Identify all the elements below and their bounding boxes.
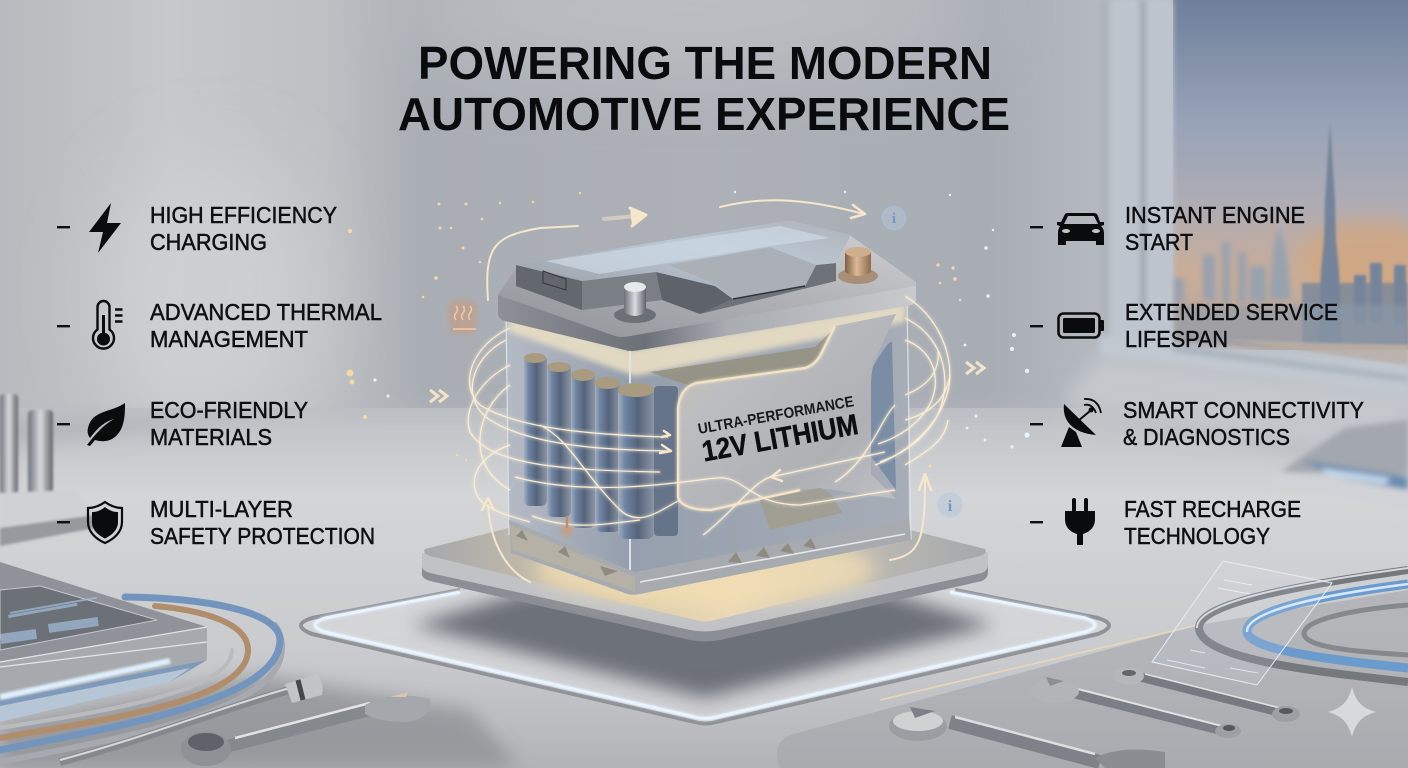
metal cylinders left [0,394,95,546]
feature: extended service lifespan: LIFESPAN [1125,326,1228,352]
wrench left [181,692,430,766]
feature: multi-layer safety protection [57,496,375,549]
icon: info bottom [938,493,962,517]
base feet [509,519,911,595]
battery body: transparent case [506,303,911,580]
left feature list [57,202,382,549]
feature: extended service lifespan: EXTENDED SERVICE [1125,299,1338,325]
feature: instant engine start [1030,202,1305,255]
icon: heat warning [449,300,477,334]
title [398,37,1010,140]
feature: eco-friendly materials [57,397,308,450]
feature: high efficiency charging: HIGH EFFICIENCY [150,202,337,228]
cables left [0,597,282,762]
feature: high efficiency charging [57,202,337,255]
energy rings and arrows [468,296,950,535]
feature: fast recharge technology: FAST RECHARGE [1124,496,1301,522]
chevrons left [430,390,447,402]
label text: ultra-performance 12V lithium: 12V LITHIUM [700,409,861,468]
feature: smart connectivity and diagnostics: SMART CONNECTIVITY [1123,397,1364,423]
feature: advanced thermal management: ADVANCED THERMAL [150,299,382,325]
label plate [678,314,896,530]
wrench C [1114,668,1300,722]
lid [498,220,916,351]
lithium cells [524,325,896,539]
feature: fast recharge technology [1030,496,1301,549]
wrench B [1031,677,1241,738]
feature: instant engine start: START [1125,229,1193,255]
right feature list [1030,202,1364,549]
icon: info top [882,206,906,230]
feature: smart connectivity and diagnostics [1030,397,1364,450]
raised cover [516,220,851,314]
feature: extended service lifespan [1030,299,1338,352]
window frame [1100,0,1408,395]
icon: sparkle watermark [1328,687,1376,737]
feature: high efficiency charging: CHARGING [150,229,267,255]
sparks [346,192,961,468]
wrench A [889,707,1165,768]
silver terminal [614,282,656,323]
copper terminal [838,247,878,284]
flow arrows around battery [482,200,931,582]
desk device right [1272,420,1408,510]
floating platform [422,520,988,642]
lower right dark surface [777,590,1408,768]
HUD panel and cables right [1152,561,1408,685]
feature: smart connectivity and diagnostics: & DIAGNOSTICS [1123,424,1290,450]
battery [498,220,916,595]
feature: instant engine start: INSTANT ENGINE [1125,202,1305,228]
feature: advanced thermal management [57,299,382,352]
tablet left bottom [0,562,207,722]
feature: multi-layer safety protection: SAFETY PROTECTION [150,523,375,549]
feature: eco-friendly materials: MATERIALS [150,424,272,450]
cables right [1197,568,1408,682]
feature: eco-friendly materials: ECO-FRIENDLY [150,397,308,423]
label text: ultra-performance 12V lithium: ULTRA-PERFORMANCE [697,393,855,438]
socket wrench left [60,674,322,762]
feature: fast recharge technology: TECHNOLOGY [1124,523,1270,549]
icon: info top: i [892,211,896,227]
chevrons right [966,362,984,374]
right wrenches [889,668,1300,768]
icon: thermometer on case [560,516,574,537]
title: AUTOMOTIVE EXPERIENCE [398,88,1010,140]
window with city skyline [1172,0,1408,366]
title: POWERING THE MODERN [418,37,992,89]
feature: advanced thermal management: MANAGEMENT [150,326,308,352]
glow base frame [301,590,1109,724]
icon: info bottom: i [948,498,953,515]
feature: multi-layer safety protection: MULTI-LAYER [150,496,293,522]
